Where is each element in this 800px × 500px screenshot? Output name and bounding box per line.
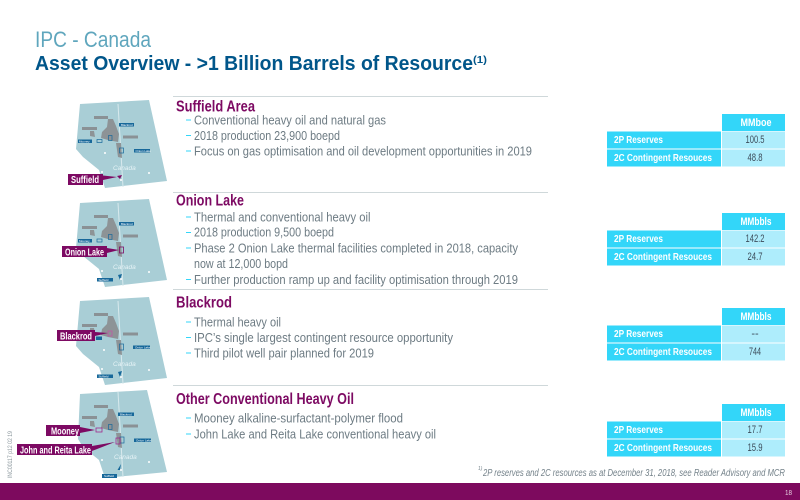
- table: Blackrod reserves: --: [751, 328, 759, 340]
- panel: Blackrod map: Suffield: [98, 374, 109, 378]
- table: Other Conventional Heavy Oil reserves: [607, 404, 785, 456]
- text block: Suffield Area: Conventional heavy oil and natural gas: [194, 114, 386, 128]
- panel: Onion Lake map: Suffield: [98, 278, 109, 282]
- text block: Onion Lake: [176, 192, 519, 287]
- table: Suffield reserves: [607, 114, 785, 166]
- document code: INC00117 p12 02 19: [8, 430, 14, 478]
- panel: Suffield Area map: Blackrod: [121, 123, 133, 127]
- title: IPC - Canada: [35, 27, 152, 52]
- label: Mooney: Mooney: [51, 426, 79, 438]
- table: Onion Lake reserves: 2C Contingent Resouces: [614, 251, 712, 263]
- text block: Blackrod: Third pilot well pair planned for 2019: [194, 346, 374, 360]
- text block: Suffield Area: 2018 production 23,900 boepd: [194, 129, 340, 143]
- panel: Onion Lake map: Canada: [113, 264, 136, 271]
- text block: Onion Lake: Phase 2 Onion Lake thermal facilities completed in 2018, capacity: [194, 242, 519, 256]
- text block: Onion Lake: now at 12,000 bopd: [194, 257, 288, 271]
- table: Onion Lake reserves: 142.2: [746, 233, 764, 245]
- text block: Onion Lake: Further production ramp up and facility optimisation through 2019: [194, 273, 518, 287]
- text block: Blackrod: IPC’s single largest contingent resource opportunity: [194, 331, 454, 345]
- table: Suffield reserves: 2P Reserves: [614, 134, 663, 146]
- text block: Other Conventional Heavy Oil: Other Conventional Heavy Oil: [176, 391, 354, 408]
- text block: Onion Lake: Onion Lake: [176, 192, 244, 210]
- table: Suffield reserves: 100.5: [746, 134, 764, 146]
- label: Mooney: [46, 425, 95, 438]
- panel: Other Conventional Heavy Oil map: Blackrod: [120, 412, 132, 416]
- panel: Other Conventional Heavy Oil map: [17, 390, 167, 478]
- table: Suffield reserves: MMboe: [740, 117, 772, 129]
- table: Other Conventional Heavy Oil reserves: 17.7: [748, 424, 762, 436]
- panel: Other Conventional Heavy Oil map: Onion Lake: [136, 438, 152, 442]
- panel: Other Conventional Heavy Oil map: Canada: [114, 454, 137, 461]
- title: Asset Overview - >1 Billion Barrels of Resource: [35, 53, 473, 75]
- table: Blackrod reserves: 2C Contingent Resouces: [614, 346, 712, 358]
- label: John and Reita Lake: John and Reita Lake: [20, 446, 91, 456]
- text block: Other Conventional Heavy Oil: John Lake and Reita Lake conventional heavy oil: [194, 428, 436, 442]
- table: Blackrod reserves: MMbbls: [740, 311, 772, 323]
- text block: Blackrod: [176, 294, 454, 360]
- panel: Onion Lake map: Blackrod: [121, 222, 133, 226]
- label: Onion Lake: Onion Lake: [65, 248, 104, 258]
- text block: Suffield Area: [176, 98, 532, 158]
- label: Blackrod: Blackrod: [60, 332, 92, 342]
- panel: Suffield Area map: Canada: [113, 165, 136, 172]
- title: [35, 27, 487, 75]
- panel: Blackrod map: Canada: [113, 361, 136, 368]
- panel: Suffield Area map: Mooney: [79, 139, 90, 143]
- table: Suffield reserves: 2C Contingent Resouces: [614, 152, 712, 164]
- panel: Onion Lake map: [62, 199, 167, 287]
- table: Blackrod reserves: [607, 308, 785, 360]
- table: Other Conventional Heavy Oil reserves: MMbbls: [740, 407, 772, 419]
- panel: Blackrod map: Onion Lake: [135, 345, 151, 349]
- panel: Suffield Area map: Onion Lake: [136, 149, 151, 153]
- panel: Suffield Area map: [68, 100, 167, 188]
- title: (1): [473, 55, 487, 66]
- text block: Other Conventional Heavy Oil: Mooney alkaline-surfactant-polymer flood: [194, 412, 403, 426]
- text block: Other Conventional Heavy Oil: [176, 391, 436, 442]
- text block: Onion Lake: Thermal and conventional heavy oil: [194, 210, 370, 224]
- table: Suffield reserves: 48.8: [748, 152, 762, 164]
- text block: Onion Lake: 2018 production 9,500 boepd: [194, 226, 334, 240]
- text block: Blackrod: Thermal heavy oil: [194, 316, 281, 330]
- text block: Suffield Area: Suffield Area: [176, 98, 255, 116]
- table: Onion Lake reserves: MMbbls: [740, 216, 772, 228]
- text block: Blackrod: Blackrod: [176, 294, 232, 312]
- table: Blackrod reserves: 744: [749, 346, 761, 358]
- footer band: [0, 483, 800, 500]
- table: Onion Lake reserves: 2P Reserves: [614, 233, 663, 245]
- table: Other Conventional Heavy Oil reserves: 15.9: [748, 442, 762, 454]
- label: Suffield: Suffield: [71, 175, 99, 186]
- table: Other Conventional Heavy Oil reserves: 2C Contingent Resouces: [614, 442, 712, 454]
- footnote: 1): [478, 466, 483, 472]
- table: Onion Lake reserves: 24.7: [748, 251, 762, 263]
- table: Other Conventional Heavy Oil reserves: 2P Reserves: [614, 424, 663, 436]
- panel: Onion Lake map: Mooney: [79, 239, 90, 243]
- text block: Suffield Area: Focus on gas optimisation and oil development opportunities in 2019: [194, 144, 532, 158]
- panel: Blackrod map: [57, 297, 167, 385]
- panel: Other Conventional Heavy Oil map: Suffield: [104, 474, 114, 478]
- table: Onion Lake reserves: [607, 213, 785, 266]
- footer band: 18: [785, 488, 792, 497]
- table: Blackrod reserves: 2P Reserves: [614, 328, 663, 340]
